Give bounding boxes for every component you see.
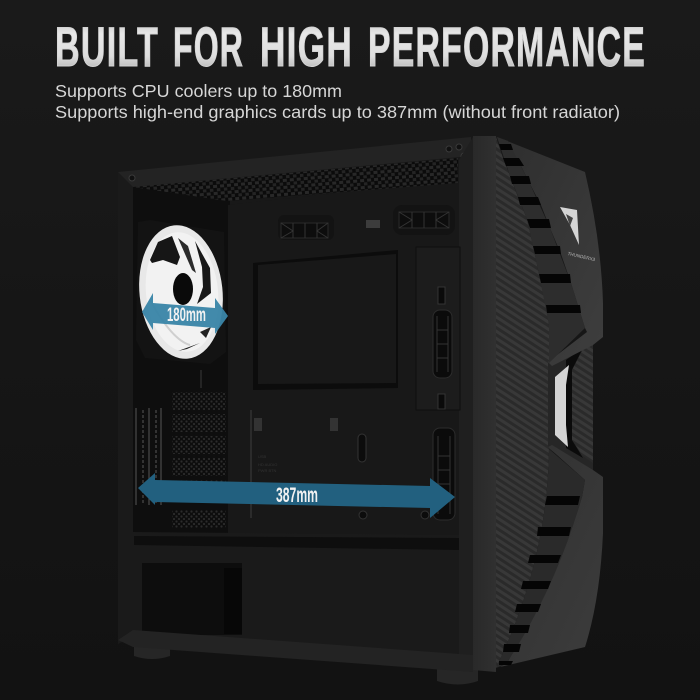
- carbon panel: [496, 137, 549, 668]
- black channel: [566, 348, 583, 458]
- lower shell: [500, 445, 603, 667]
- left frame: [118, 172, 133, 644]
- feet: [134, 645, 478, 684]
- bottom bar: [118, 630, 473, 672]
- arrow: 387mm: [138, 473, 455, 518]
- top bar: [118, 137, 471, 187]
- upper slats: [499, 144, 581, 313]
- pillar: [473, 136, 496, 672]
- subtitle text: Supports high-end graphics cards up to 387mm (without front radiator): [55, 102, 620, 122]
- front panel: [473, 136, 603, 672]
- title: HIGH: [260, 15, 353, 78]
- case body: [118, 137, 473, 672]
- right carbon section: [572, 344, 593, 463]
- motherboard tray: [228, 180, 459, 535]
- arrow: 387mm: 387mm: [276, 484, 318, 507]
- drive panel: [416, 247, 460, 410]
- fan: [133, 220, 229, 364]
- arrow: 180mm: [142, 293, 228, 334]
- cable grommets: [278, 205, 455, 240]
- upper shell: [497, 137, 603, 366]
- lower vent: [496, 448, 585, 668]
- top mesh: [133, 158, 458, 201]
- subtitle text: Supports CPU coolers up to 180mm: [55, 81, 342, 101]
- center recess: [548, 332, 593, 477]
- lower tray details: USB: [258, 454, 267, 459]
- subtitle text: [55, 81, 620, 122]
- logo: THUNDERX3: [567, 251, 596, 262]
- title: FOR: [173, 15, 244, 78]
- upper vent: [497, 137, 585, 363]
- interior rear chamber: [133, 186, 230, 535]
- lower tray details: HD AUDIO: [258, 462, 277, 467]
- arrow: 180mm: 180mm: [167, 305, 206, 326]
- lower slats: [499, 496, 580, 665]
- logo: [560, 207, 596, 262]
- right frame: [459, 137, 473, 672]
- lower tray details: PWR BTN: [258, 468, 277, 473]
- white light: [555, 365, 569, 447]
- lower tray details: [250, 410, 455, 520]
- rear PCI slots: [134, 370, 228, 536]
- title: [55, 15, 646, 78]
- tray cutout: [253, 250, 398, 390]
- title: BUILT: [55, 15, 159, 78]
- psu shroud: [133, 532, 459, 655]
